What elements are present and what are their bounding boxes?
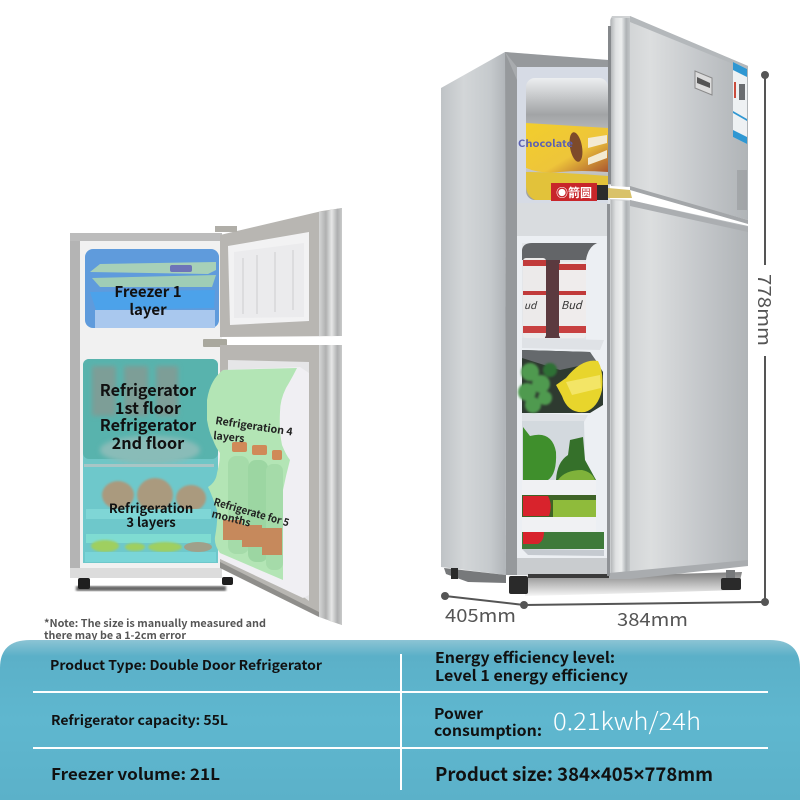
freezer compartment: [517, 67, 608, 203]
right fridge product photo: [441, 16, 748, 596]
door hinge: [608, 188, 632, 198]
door shelf white: [218, 367, 309, 598]
spec: energy efficiency: [435, 647, 628, 686]
panel background: [0, 640, 800, 800]
floor shadow: [525, 572, 742, 596]
door shelf green overlay: [207, 368, 297, 580]
lower open door: [207, 345, 342, 625]
fridge side panel: [441, 52, 506, 575]
energy sticker: [733, 62, 747, 144]
size measurement note: *Note: The size is manually measured and: [44, 616, 266, 631]
spec: product size: Product size: 384×405×778mm: [435, 760, 713, 787]
spec: power consumption: [434, 702, 701, 741]
depth line: [441, 592, 524, 628]
fridge labels: 1st floor: [115, 395, 182, 419]
shelf 2: [522, 413, 588, 422]
beer cans: Bud: [561, 297, 583, 313]
under-cabinet strip: [444, 568, 506, 583]
bottom plinth: [70, 568, 222, 578]
door labels: layers: [213, 428, 245, 446]
freezer label: Freezer 1: [114, 281, 182, 302]
spec: freezer volume: Freezer volume: 21L: [51, 761, 220, 785]
spec: refrigerator capacity: Refrigerator capacity: 55L: [51, 709, 228, 729]
spec: energy efficiency: Level 1 energy efficiency: [435, 665, 628, 686]
middle divider panel: [517, 203, 608, 236]
spec: energy efficiency: Energy efficiency level:: [435, 647, 615, 668]
fridge labels: Refrigerator: [100, 412, 197, 436]
fridge labels: Refrigerator: [100, 377, 197, 401]
size measurement note: there may be a 1-2cm error: [44, 628, 186, 643]
door labels: Refrigerate for 5: [212, 494, 291, 530]
door labels: Refrigeration 4: [214, 413, 294, 439]
third layer label: [109, 498, 193, 531]
spec text block: [737, 170, 747, 210]
bottles: [223, 442, 283, 570]
width line: [520, 598, 769, 632]
door rack shelves: [522, 480, 604, 549]
cabinet shadow and feet: [76, 577, 233, 591]
middle hinge: [203, 339, 227, 347]
specification panel: [0, 640, 800, 800]
door labels: months: [210, 506, 252, 531]
spec: product type: Product Type: Double Door Refrigerator: [50, 654, 322, 674]
spec: power consumption: Power: [434, 703, 483, 724]
label: chocolate: Chocolate: [518, 135, 573, 150]
upper door: [608, 16, 748, 224]
beer cans: ud: [524, 297, 538, 312]
door labels: [210, 413, 294, 531]
freezer label: layer: [129, 299, 167, 320]
fridge labels: [100, 377, 197, 454]
door badge: [695, 71, 712, 95]
left fridge interior diagram: [70, 208, 342, 625]
width line: 384mm: [617, 606, 688, 632]
feet: [451, 568, 741, 594]
third layer label: 3 layers: [126, 512, 176, 531]
height line: [752, 71, 778, 602]
freezer cavity: [85, 249, 219, 328]
spec: power consumption: consumption:: [434, 720, 542, 741]
door bottom edge: [220, 562, 319, 617]
fridge front frame: [505, 52, 610, 578]
package label: ◉箭圆: [556, 184, 592, 201]
dimension lines: [441, 71, 778, 632]
third layer label: Refrigeration: [109, 498, 193, 517]
shelf 1: [522, 338, 604, 350]
upper hinge: [215, 226, 237, 232]
beer cans: [523, 258, 586, 338]
depth line: 405mm: [445, 602, 516, 628]
fridge cavity: [83, 359, 218, 563]
lower door: [607, 199, 748, 579]
grapes and star fruit: [518, 350, 603, 413]
table dividers: [33, 654, 768, 790]
bottom frame: [517, 558, 608, 575]
fridge compartment: [517, 236, 608, 575]
upper open door: [220, 208, 342, 337]
cabinet frame: [70, 233, 222, 578]
height line: 778mm: [752, 274, 778, 346]
size measurement note: [44, 616, 266, 643]
fridge labels: 2nd floor: [112, 430, 185, 454]
bottom drawer edge: [522, 549, 604, 556]
vegetables: peppers: [522, 421, 596, 480]
freezer label: [114, 281, 182, 320]
spec: power consumption: 0.21kwh/24h: [553, 702, 701, 737]
